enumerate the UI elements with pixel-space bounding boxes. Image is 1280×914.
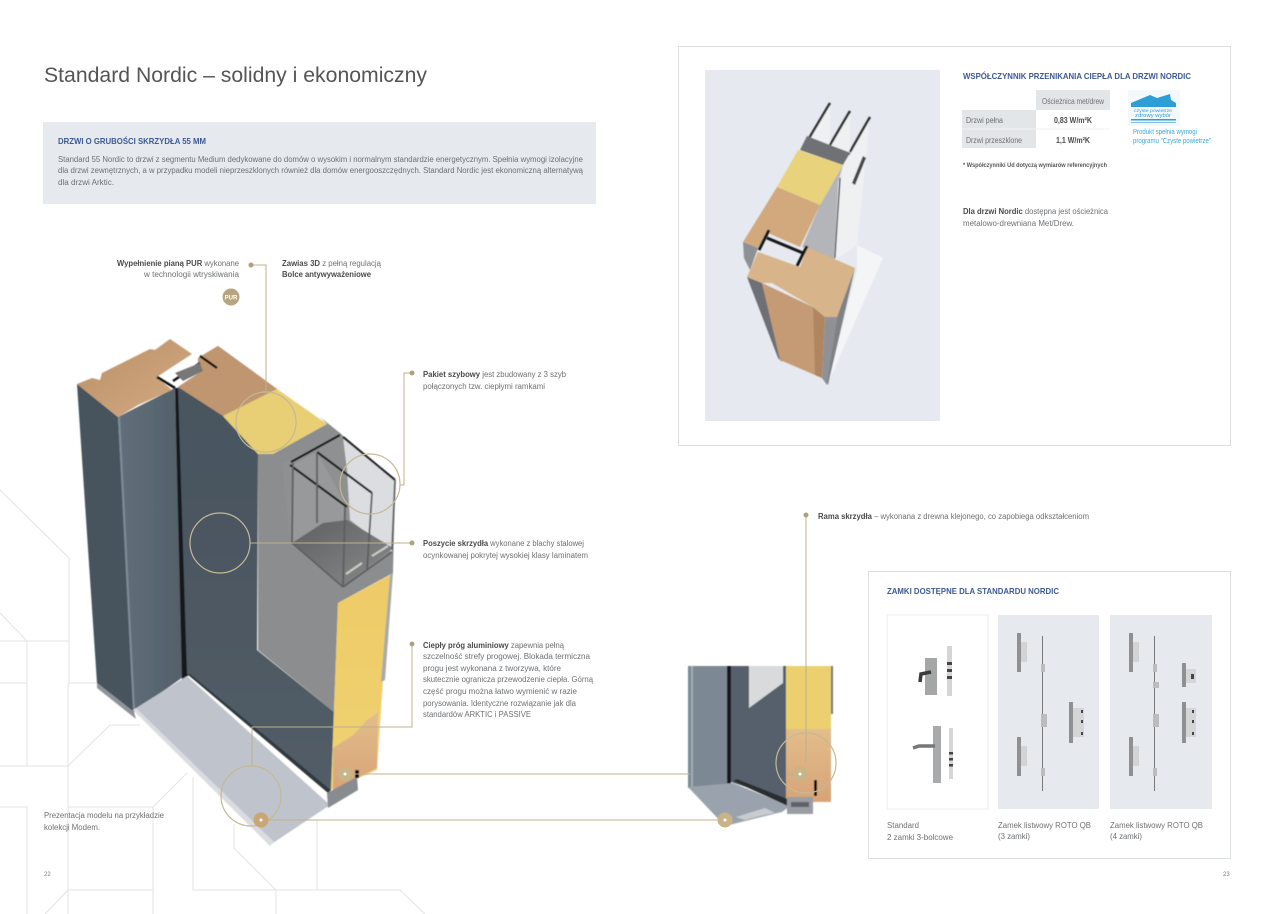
label: PUR foam: w technologii wtryskiwania [143,270,240,279]
leader: threshold [221,642,414,826]
label: threshold: progu jest wykonana z tworzywa, które [423,664,562,673]
connector: upper marker [338,766,808,782]
label: threshold: szczelność strefy progowej. Blokada termiczna [423,652,591,661]
label: hinge: Zawias 3D z pełną regulacją [282,259,382,268]
label: threshold [423,641,594,719]
caption: ROTO QB 4 [1110,821,1203,841]
label: PUR foam [117,259,240,279]
caption: ROTO QB 3: (3 zamki) [998,832,1030,841]
leader: PUR foam [236,262,296,452]
label: threshold: Ciepły próg aluminiowy zapewnia pełną [423,641,565,650]
title: Standard Nordic – solidny i ekonomiczny [44,64,427,87]
icon: clean air logo: czyste powietrze [1134,108,1173,113]
panel: intro [43,122,596,204]
intro heading: DRZWI O GRUBOŚCI SKRZYDŁA 55 MM [58,135,206,146]
intro text: dla drzwi Arktic. [58,178,114,187]
label: threshold: część progu można łatwo wymienić w razie [423,687,578,696]
connector: lower marker [254,812,732,828]
logo caption [1133,129,1211,145]
note: Dla drzwi Nordic dostępna jest ościeżnica [963,207,1109,216]
label: threshold: porysowania. Identyczne rozwiązanie jak dla [423,699,577,708]
table: Ościeżnica met/drew [1042,97,1104,106]
caption: model: kolekcji Modem. [44,823,100,832]
main door illustration [77,339,395,846]
logo caption: Produkt spełnia wymogi [1133,129,1197,136]
leader: glazing [340,370,414,514]
caption: ROTO QB 3: Zamek listwowy ROTO QB [998,821,1091,830]
cross-section image [705,70,940,421]
intro text: dla drzwi zewnętrznych, a w przypadku modeli nieprzeszklonych również dla domów energooszczędnych. Standard Nordic jest ekonomiczną alternatywą [58,166,584,175]
locks heading: ZAMKI DOSTĘPNE DLA STANDARDU NORDIC [887,586,1059,596]
caption: ROTO QB 4: Zamek listwowy ROTO QB [1110,821,1203,830]
caption: model: Prezentacja modelu na przykładzie [44,811,165,820]
door threshold detail [688,666,833,826]
label: glazing: połączonych tzw. ciepłymi ramkami [423,382,545,391]
label: leaf cladding: ocynkowanej pokrytej wysokiej klasy laminatem [423,551,588,560]
label: glazing: Pakiet szybowy jest zbudowany z 3 szyb [423,370,567,379]
panel: heat transfer [678,46,1230,446]
label: frame: Rama skrzydła – wykonana z drewna klejonego, co zapobiega odkształceniom [818,512,1089,521]
note [963,207,1109,228]
lock: ROTO QB 3 [998,615,1099,809]
table: Drzwi pełna [966,116,1003,125]
panel: locks [868,572,1230,858]
label: PUR foam: Wypełnienie pianą PUR wykonane [117,259,240,268]
label: threshold: standardów ARKTIC i PASSIVE [423,710,531,719]
table: Drzwi przeszklone [966,136,1022,145]
caption: standard: 2 zamki 3-bolcowe [887,833,954,842]
logo caption: programu "Czyste powietrze" [1133,138,1211,145]
label: leaf cladding: Poszycie skrzydła wykonane z blachy stalowej [423,539,584,548]
table: 0,83 W/m²K [1054,116,1092,125]
leader: frame [776,512,836,793]
leader: leaf cladding [190,513,414,573]
caption: ROTO QB 3 [998,821,1091,841]
icon: PUR badge: PUR [225,296,238,302]
caption: ROTO QB 4: (4 zamki) [1110,832,1142,841]
caption: model [44,811,165,832]
intro text [58,155,584,187]
heat heading: WSPÓŁCZYNNIK PRZENIKANIA CIEPŁA DLA DRZWI NORDIC [963,70,1191,81]
icon: clean air logo [1128,90,1180,126]
lock: standard [887,615,988,809]
label: threshold: skutecznie ogranicza przewodzenie ciepła. Górną [423,675,594,684]
label: hinge [282,259,382,279]
caption: standard: Standard [887,821,919,830]
table: 1,1 W/m²K [1056,136,1090,145]
page number right: 23 [1223,872,1230,878]
label: hinge: Bolce antywyważeniowe [282,270,372,279]
label: leaf cladding [423,539,588,560]
lock: ROTO QB 4 [1110,615,1212,809]
caption: standard [887,821,954,842]
icon: PUR badge [222,288,240,306]
intro text: Standard 55 Nordic to drzwi z segmentu Medium dedykowane do domów o wysokim i normalnym standardzie energetycznym. Spełnia wymogi izolacyjne [58,155,584,164]
footnote: * Współczynniki Ud dotyczą wymiarów referencyjnych [963,163,1107,169]
note: metalowo-drewniana Met/Drew. [963,219,1074,228]
label: glazing [423,370,567,391]
icon: clean air logo: zdrowy wybór [1135,113,1171,119]
page number left: 22 [44,872,51,878]
table [962,90,1110,148]
